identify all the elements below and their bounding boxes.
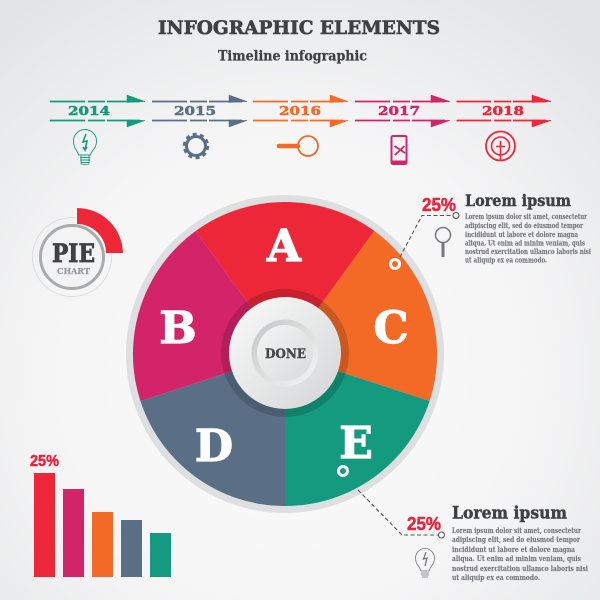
timeline 2017: 2017 [378,104,420,118]
timeline 2015: 2015 [174,104,216,118]
segment C [285,231,437,401]
icon: grey light bulb [416,548,434,577]
icon: magenta phone with plane [392,136,406,164]
timeline 2016 [253,95,348,127]
red quarter sector [77,208,123,253]
timeline 2018: 2018 [482,104,524,118]
callout text top: ut aliquip ex ea commodo. [465,256,547,264]
segment E [285,354,430,506]
main donut chart [126,195,444,513]
marker on segment C [390,260,400,268]
callout heading bottom: Lorem ipsum [452,504,568,522]
segment B [133,231,285,401]
icon: teal light bulb [74,130,96,164]
title: INFOGRAPHIC ELEMENTS [158,17,440,39]
callout text bottom: ut aliquip ex ea commodo. [452,573,540,582]
segment A [196,202,374,354]
callout percent top: 25% [422,195,456,215]
icon: grey magnifier [436,228,450,257]
timeline 2016: 2016 [279,104,321,118]
icon: orange magnifier [279,136,318,156]
letter B: B [159,303,197,354]
callout heading top: Lorem ipsum [465,191,571,210]
letter D: D [195,421,233,472]
callout text top [465,212,591,264]
center button: DONE [265,347,306,362]
timeline 2018 [456,95,551,127]
icon: slate gear [184,134,208,158]
CHART label: CHART [57,266,90,276]
segment D [140,354,285,506]
icon: red target [486,132,515,160]
marker on segment E [338,466,348,476]
callout leader top [400,212,459,257]
letter A: A [266,221,302,272]
bar chart [30,453,171,577]
timeline 2017 [355,95,450,127]
timeline 2014 [50,95,145,127]
callout leader bottom [358,490,444,538]
letter E: E [339,418,373,469]
bar chart percent: 25% [30,453,59,470]
timeline 2015 [152,95,247,127]
timeline 2014: 2014 [68,104,110,118]
subtitle: Timeline infographic [218,48,367,64]
letter C: C [373,303,409,354]
center button [229,297,341,409]
PIE label: PIE [52,239,95,268]
pie chart badge [32,208,123,296]
callout text bottom [452,526,588,582]
callout percent bottom: 25% [407,514,441,534]
